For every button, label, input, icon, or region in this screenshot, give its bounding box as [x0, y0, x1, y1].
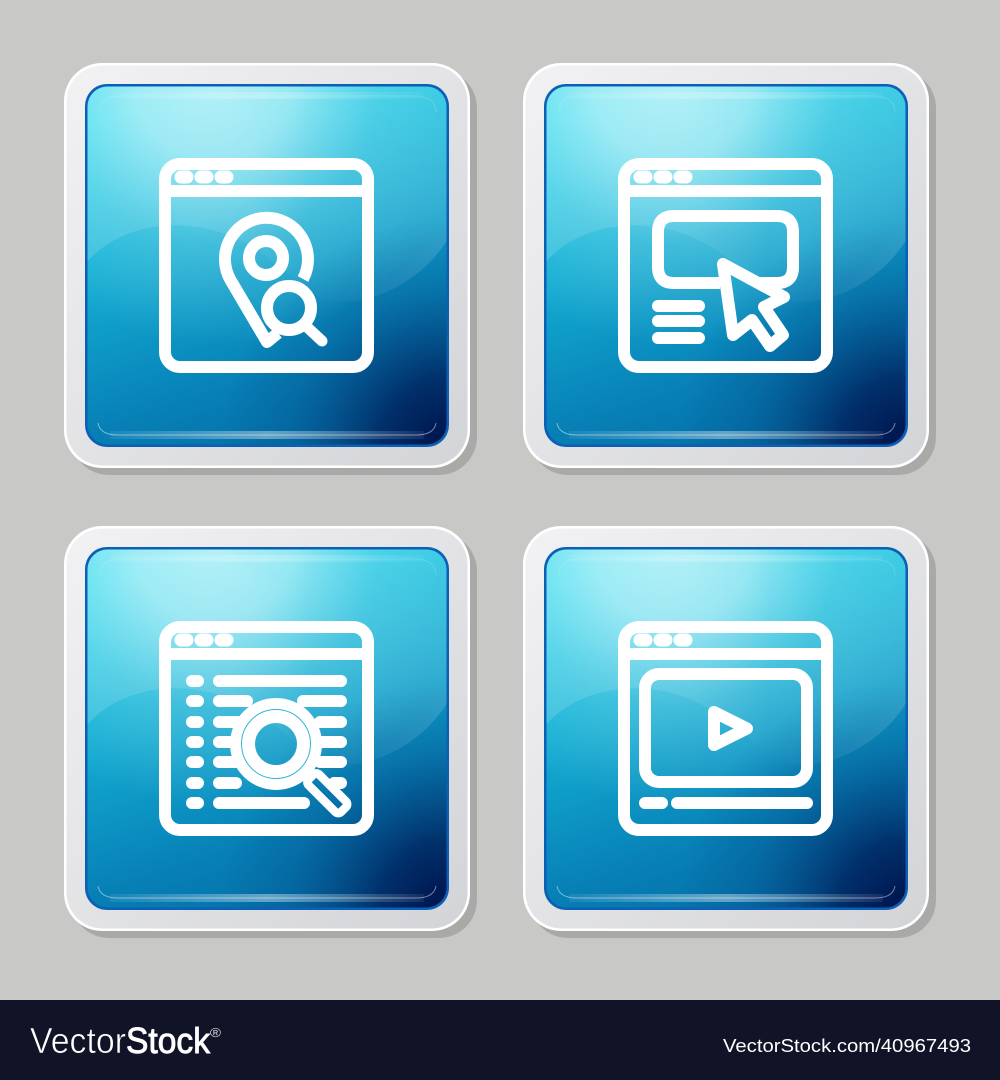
icon: browser window with video player [624, 627, 827, 830]
image id url: VectorStock.com/40967493 [723, 1036, 971, 1056]
icon: browser window with button and cursor [624, 164, 827, 367]
footer bar [0, 1000, 1000, 1080]
panel: search list button [64, 526, 477, 938]
icon: browser window with text list and magnifier [165, 627, 368, 830]
panel: map pin search button [64, 63, 477, 475]
logo wordmark: Vector [30, 1020, 126, 1061]
panel: video player button [523, 526, 936, 938]
icon: browser window with map pin and magnifier [165, 164, 368, 367]
logo wordmark [30, 1020, 221, 1061]
logo wordmark: ® [210, 1025, 221, 1040]
logo wordmark: Stock [126, 1020, 211, 1061]
panel: click button [523, 63, 936, 475]
